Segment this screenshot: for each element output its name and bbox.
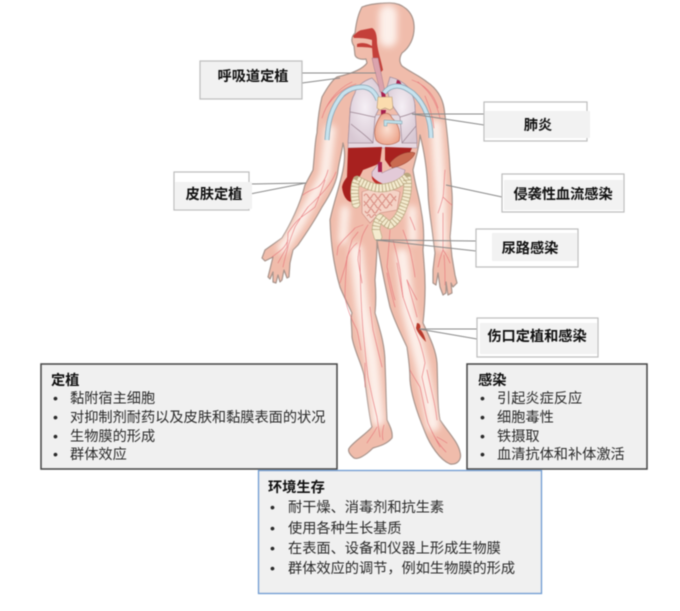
panel: environmental survival: • [270, 561, 275, 577]
panel: colonization: • [53, 391, 58, 407]
airway and trachea [353, 28, 402, 116]
label: pneumonia: 肺炎 [524, 118, 552, 134]
wound on leg [416, 323, 426, 342]
panel: environmental survival: • [270, 500, 275, 516]
label: wound colonization and infection [419, 318, 598, 357]
chest cavity [348, 105, 417, 148]
skin highlights [283, 14, 442, 425]
label: skin colonization [174, 172, 306, 210]
panel: colonization: • [53, 429, 58, 445]
liver [342, 147, 382, 202]
thymus [377, 97, 393, 110]
panel: environmental survival: 环境生存 [268, 479, 325, 496]
panel: colonization: 黏附宿主细胞 [70, 390, 155, 407]
panel: environmental survival: 在表面、设备和仪器上形成生物膜 [288, 540, 501, 557]
panel: environmental survival: • [270, 541, 275, 557]
label: wound colonization and infection: 伤口定植和感染 [487, 328, 587, 345]
panel: colonization: 定植 [51, 372, 79, 389]
panel: infection: 血清抗体和补体激活 [497, 446, 625, 463]
panel: colonization: 群体效应 [70, 446, 127, 463]
panel: infection: 感染 [478, 372, 506, 389]
heart [375, 113, 402, 145]
panel: infection: 铁摄取 [497, 428, 540, 445]
panel: infection [467, 364, 647, 469]
label: respiratory colonization: 呼吸道定植 [218, 68, 288, 85]
panel: colonization: • [53, 447, 58, 463]
panel: infection: 引起炎症反应 [497, 390, 582, 407]
panel: infection: • [480, 410, 485, 426]
panel: infection: • [480, 447, 485, 463]
panel: environmental survival: • [270, 521, 275, 537]
small intestine [362, 189, 400, 223]
upper abdominal organs [372, 147, 415, 187]
lungs [348, 77, 417, 143]
label: invasive bloodstream infection: 侵袭性血流感染 [513, 186, 613, 203]
panel: infection: • [480, 429, 485, 445]
veins and capillaries [272, 80, 452, 452]
panel: colonization: 对抑制剂耐药以及皮肤和黏膜表面的状况 [70, 410, 325, 426]
label: skin colonization: 皮肤定植 [186, 186, 242, 203]
label: urinary tract infection: 尿路感染 [502, 240, 558, 257]
panel: colonization [41, 364, 337, 469]
panel: environmental survival [258, 470, 542, 594]
panel: environmental survival: 耐干燥、消毒剂和抗生素 [288, 500, 444, 516]
label: respiratory colonization [200, 61, 376, 99]
label: urinary tract infection [376, 229, 578, 267]
panel: environmental survival: 群体效应的调节，例如生物膜的形成 [288, 560, 515, 577]
blue tubes [327, 86, 431, 140]
panel: infection: • [480, 391, 485, 407]
label: pneumonia [412, 102, 590, 141]
panel: colonization: 生物膜的形成 [70, 429, 155, 445]
panel: infection: 细胞毒性 [497, 410, 554, 426]
large intestine [355, 177, 408, 237]
human body figure [262, 3, 461, 464]
body silhouette [262, 3, 461, 464]
panel: colonization: • [53, 410, 58, 426]
panel: environmental survival: 使用各种生长基质 [288, 520, 402, 537]
label: invasive bloodstream infection [446, 174, 624, 212]
small intestine loops [364, 194, 396, 218]
